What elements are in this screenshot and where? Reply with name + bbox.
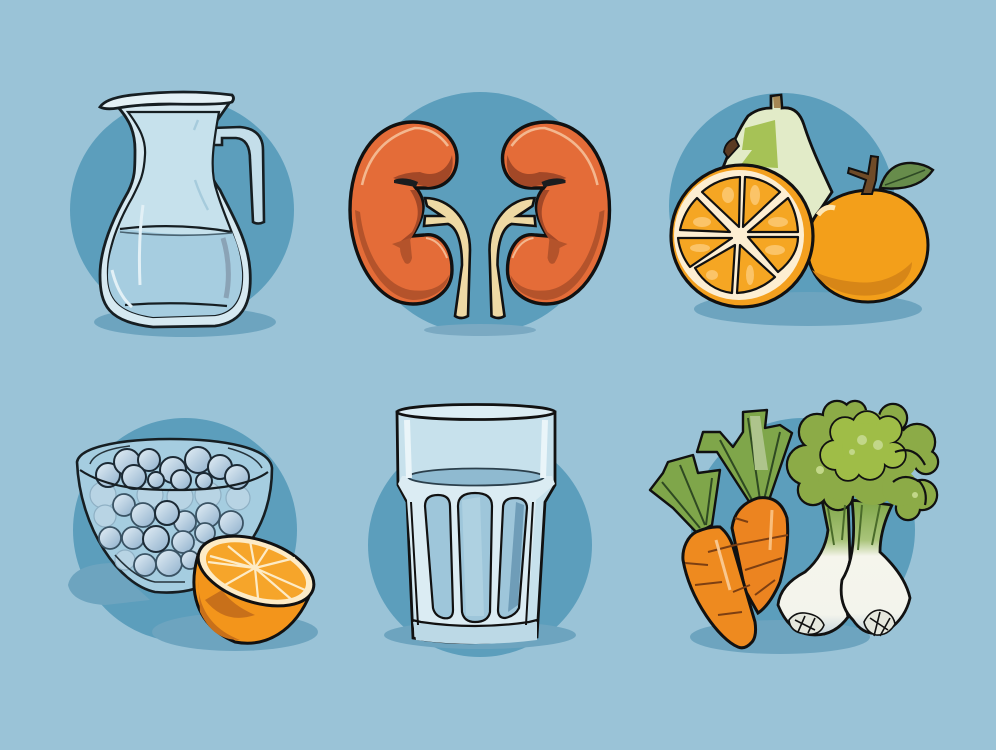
- icon: pear, orange slice and orange: [669, 93, 933, 326]
- front carrot: [683, 527, 756, 648]
- leaf: [880, 163, 933, 189]
- whole orange: [807, 190, 928, 302]
- orange half: [194, 555, 311, 643]
- leek greens back: [788, 402, 937, 519]
- icon: kidneys: [350, 92, 610, 336]
- left kidney: [350, 122, 457, 304]
- pitcher rim: [100, 92, 234, 109]
- icon: bowl of blueberries with orange half: [68, 418, 323, 651]
- right kidney: [490, 122, 610, 318]
- bowl rim front: [80, 470, 268, 490]
- icon: glass of water: [368, 404, 592, 657]
- leek green fold lines: [893, 450, 926, 505]
- icon: carrots and leeks: [650, 402, 937, 654]
- back carrot: [732, 498, 788, 613]
- glass panels: [425, 493, 527, 622]
- front carrot leaves: [650, 455, 720, 533]
- glass body: [397, 412, 555, 643]
- pitcher handle: [212, 127, 264, 224]
- leek stems: [828, 505, 880, 550]
- leek greens front: [821, 412, 905, 480]
- pitcher body: [100, 102, 250, 327]
- back carrot leaves: [697, 410, 792, 503]
- left leek: [778, 500, 850, 635]
- right leek: [841, 500, 910, 634]
- icon: water pitcher: [70, 92, 294, 337]
- pitcher water: [108, 228, 242, 317]
- glass rim: [397, 404, 555, 420]
- pear: [722, 95, 832, 240]
- bowl glass: [77, 439, 272, 593]
- leek roots: [789, 610, 895, 636]
- berries: [96, 447, 249, 490]
- water surface: [408, 468, 544, 486]
- left ureter: [424, 198, 470, 318]
- stem: [848, 156, 878, 194]
- faint berries: [90, 482, 250, 570]
- orange slice: [671, 165, 813, 307]
